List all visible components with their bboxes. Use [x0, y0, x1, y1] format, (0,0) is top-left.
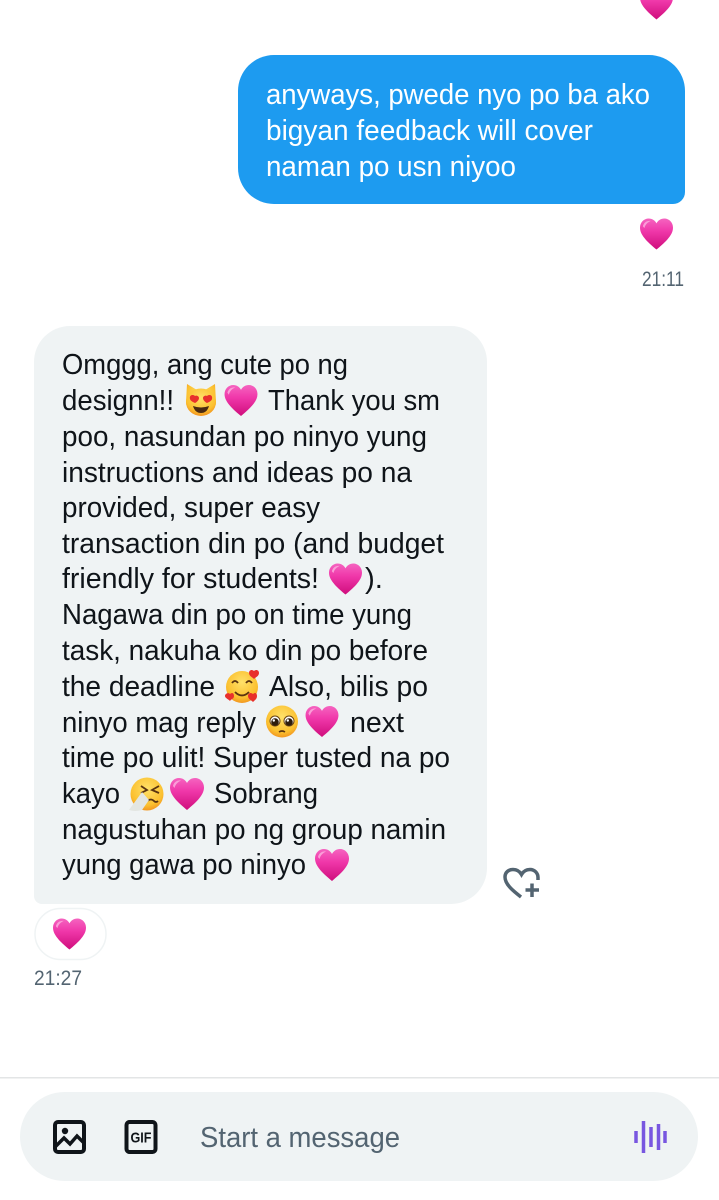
message composer bar — [20, 1092, 698, 1181]
icon: sneezing face emoji — [129, 778, 164, 811]
received message bubble: task, nakuha ko din po before — [62, 635, 428, 667]
sent message bubble: bigyan feedback will cover — [266, 115, 593, 147]
received message bubble: Sobrang — [214, 778, 318, 810]
received message bubble: poo, nasundan po ninyo yung — [62, 421, 427, 453]
received message bubble: Thank you sm — [268, 385, 440, 417]
sent message bubble: naman po usn niyoo — [266, 151, 516, 183]
received message bubble: the deadline — [62, 671, 215, 703]
reaction pill with heart — [35, 908, 106, 960]
icon: GIF: GIF — [130, 1130, 152, 1146]
received message bubble: ). — [365, 563, 383, 595]
received message bubble: instructions and ideas po na — [62, 457, 412, 489]
icon: heart-eyes cat emoji — [186, 384, 216, 416]
received message bubble: yung gawa po ninyo — [62, 849, 306, 881]
icon: GIF — [126, 1122, 156, 1152]
icon: image — [55, 1122, 84, 1152]
received message bubble — [34, 326, 487, 904]
icon: voice message — [636, 1121, 665, 1153]
received message bubble: nagustuhan po ng group namin — [62, 814, 446, 846]
received message bubble: kayo — [62, 778, 120, 810]
received message bubble: designn!! — [62, 385, 174, 417]
received message bubble: friendly for students! — [62, 563, 319, 595]
sent message bubble — [238, 55, 685, 204]
received message bubble: Nagawa din po on time yung — [62, 599, 412, 631]
icon: smiling face with hearts emoji — [225, 670, 259, 703]
timestamp 21:11: 21:11 — [642, 268, 684, 291]
icon: add reaction heart — [505, 870, 539, 897]
icon: pleading face emoji — [266, 706, 298, 738]
received message bubble: time po ulit! Super tusted na po — [62, 742, 450, 774]
icon: cropped reaction heart at top — [640, 0, 673, 20]
received message bubble: provided, super easy — [62, 492, 321, 524]
received message bubble: Also, bilis po — [269, 671, 428, 703]
received message bubble: Omggg, ang cute po ng — [62, 349, 348, 381]
received message bubble: ninyo mag reply — [62, 707, 257, 739]
icon: reaction heart on sent message — [640, 218, 673, 250]
timestamp 21:27: 21:27 — [34, 967, 82, 990]
sent message bubble: anyways, pwede nyo po ba ako — [266, 79, 650, 111]
received message bubble: transaction din po (and budget — [62, 528, 444, 560]
received message bubble: next — [350, 707, 404, 739]
placeholder text: Start a message — [200, 1122, 400, 1154]
